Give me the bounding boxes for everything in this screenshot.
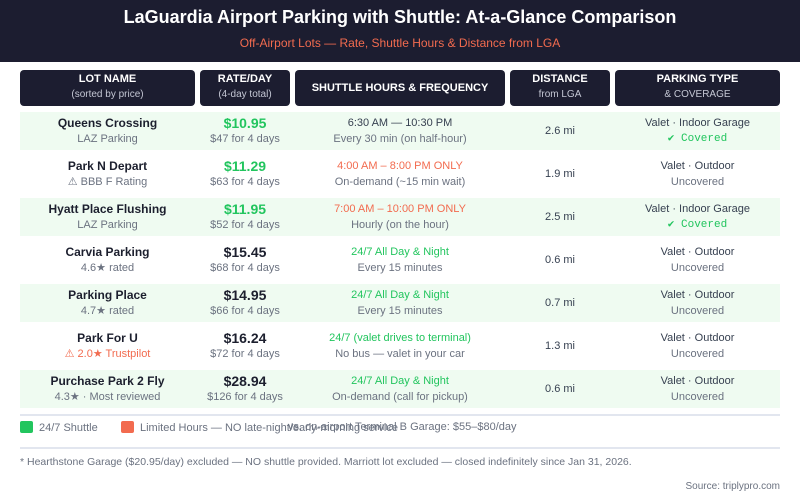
row: Park N Depart: Valet · Outdoor (661, 160, 734, 172)
title: LaGuardia Airport Parking with Shuttle: At-a-Glance Comparison (124, 7, 676, 27)
legend: 24/7: 24/7 Shuttle (39, 422, 98, 434)
legend: limited: Limited Hours — NO late-night/early-morning service (140, 422, 398, 434)
row: Parking Place: Uncovered (671, 305, 724, 317)
header: type (615, 70, 780, 106)
row: Queens Crossing: Queens Crossing (58, 116, 157, 130)
row: Carvia Parking: $15.45 (224, 244, 266, 260)
row: Queens Crossing: 2.6 mi (545, 125, 575, 137)
row: Park N Depart: 1.9 mi (545, 168, 575, 180)
legend (20, 421, 516, 434)
row: Park N Depart: On-demand (~15 min wait) (335, 176, 465, 188)
row: Parking Place: Every 15 minutes (358, 305, 442, 317)
header: rate: (4-day total) (218, 89, 272, 100)
row: Parking Place: $66 for 4 days (210, 305, 280, 317)
row: Carvia Parking: Uncovered (671, 262, 724, 274)
row: Park For U: Uncovered (671, 348, 724, 360)
row: Queens Crossing: $10.95 (224, 115, 266, 131)
row: Park For U: ⚠ 2.0★ Trustpilot (65, 348, 150, 360)
row: Carvia Parking: $68 for 4 days (210, 262, 280, 274)
header: type: & COVERAGE (664, 89, 731, 100)
row: Queens Crossing: Valet · Indoor Garage (645, 117, 750, 129)
row: Hyatt Place Flushing: Hourly (on the hour) (351, 219, 449, 231)
table header (20, 70, 780, 106)
row: Hyatt Place Flushing (20, 198, 780, 236)
header: lot name (20, 70, 195, 106)
row: Purchase Park 2 Fly: On-demand (call for pickup) (332, 391, 468, 403)
header: lot name: LOT NAME (79, 73, 136, 85)
row: Purchase Park 2 Fly: $126 for 4 days (207, 391, 283, 403)
row: Park For U: $72 for 4 days (210, 348, 280, 360)
row: Queens Crossing: ✔ Covered (668, 133, 727, 145)
row: Hyatt Place Flushing: 7:00 AM – 10:00 PM ONLY (334, 203, 466, 215)
header: shuttle (295, 70, 505, 106)
header: lot name: (sorted by price) (71, 89, 144, 100)
footnote: * Hearthstone Garage ($20.95/day) excluded — NO shuttle provided. Marriott lot excluded — closed indefinitely since Jan 31, 2026. (20, 456, 632, 468)
row: Park N Depart: $11.29 (224, 158, 266, 174)
row: Park N Depart: $63 for 4 days (210, 176, 280, 188)
row: Purchase Park 2 Fly: Valet · Outdoor (661, 375, 734, 387)
row: Carvia Parking (65, 244, 734, 274)
row: Parking Place: Parking Place (68, 288, 147, 302)
row: Park For U: 1.3 mi (545, 340, 575, 352)
row: Parking Place: Valet · Outdoor (661, 289, 734, 301)
row: Carvia Parking: 24/7 All Day & Night (351, 246, 449, 258)
row: Carvia Parking: Valet · Outdoor (661, 246, 734, 258)
row: Parking Place: 0.7 mi (545, 297, 575, 309)
row: Hyatt Place Flushing: Valet · Indoor Garage (645, 203, 750, 215)
row: Purchase Park 2 Fly: 0.6 mi (545, 383, 575, 395)
row: Queens Crossing: $47 for 4 days (210, 133, 280, 145)
header: rate: RATE/DAY (218, 73, 272, 85)
row: Hyatt Place Flushing: Hyatt Place Flushing (48, 202, 167, 216)
row: Parking Place: 24/7 All Day & Night (351, 289, 449, 301)
row: Carvia Parking: 0.6 mi (545, 254, 575, 266)
row: Park For U: 24/7 (valet drives to terminal) (329, 332, 471, 344)
header: type: PARKING TYPE (657, 73, 738, 85)
title banner (0, 0, 800, 62)
row: Purchase Park 2 Fly: Uncovered (671, 391, 724, 403)
legend: vs. on-airport Terminal B Garage: $55–$80/day (288, 421, 516, 433)
header: distance (510, 70, 610, 106)
row: Park For U (65, 330, 734, 360)
row: Park N Depart (68, 158, 734, 188)
row: Hyatt Place Flushing: LAZ Parking (77, 219, 138, 231)
header: shuttle: SHUTTLE HOURS & FREQUENCY (312, 82, 488, 94)
row: Park For U: No bus — valet in your car (335, 348, 465, 360)
row: Hyatt Place Flushing: $11.95 (224, 201, 266, 217)
source: Source: triplypro.com (686, 481, 780, 492)
row: Hyatt Place Flushing: 2.5 mi (545, 211, 575, 223)
row: Park For U: $16.24 (224, 330, 266, 346)
subtitle: Off-Airport Lots — Rate, Shuttle Hours & Distance from LGA (240, 36, 560, 50)
row: Hyatt Place Flushing: ✔ Covered (668, 219, 727, 231)
row: Purchase Park 2 Fly: Purchase Park 2 Fly (50, 374, 165, 388)
row: Queens Crossing: 6:30 AM — 10:30 PM (348, 117, 452, 129)
row: Carvia Parking: Every 15 minutes (358, 262, 442, 274)
legend: 24/7 (20, 421, 98, 434)
header: distance: from LGA (539, 89, 581, 100)
row: Carvia Parking: 4.6★ rated (81, 262, 134, 274)
row: Park N Depart: Park N Depart (68, 159, 147, 173)
row: Queens Crossing: LAZ Parking (77, 133, 138, 145)
row: Park N Depart: Uncovered (671, 176, 724, 188)
row: Parking Place: 4.7★ rated (81, 305, 134, 317)
row: Park For U: Valet · Outdoor (661, 332, 734, 344)
row: Purchase Park 2 Fly: 24/7 All Day & Night (351, 375, 449, 387)
row: Park N Depart: 4:00 AM – 8:00 PM ONLY (337, 160, 463, 172)
row: Parking Place: $14.95 (224, 287, 266, 303)
header: rate (200, 70, 290, 106)
row: Park N Depart: ⚠ BBB F Rating (68, 176, 147, 188)
row: Queens Crossing: Every 30 min (on half-hour) (333, 133, 467, 145)
row: Hyatt Place Flushing: $52 for 4 days (210, 219, 280, 231)
row: Queens Crossing (20, 112, 780, 150)
row: Purchase Park 2 Fly: 4.3★ · Most reviewed (55, 391, 160, 403)
row: Parking Place (20, 284, 780, 322)
row: Purchase Park 2 Fly: $28.94 (224, 373, 266, 389)
header: distance: DISTANCE (532, 73, 588, 85)
row: Purchase Park 2 Fly (20, 370, 780, 408)
row: Carvia Parking: Carvia Parking (65, 245, 150, 259)
row: Park For U: Park For U (77, 331, 138, 345)
